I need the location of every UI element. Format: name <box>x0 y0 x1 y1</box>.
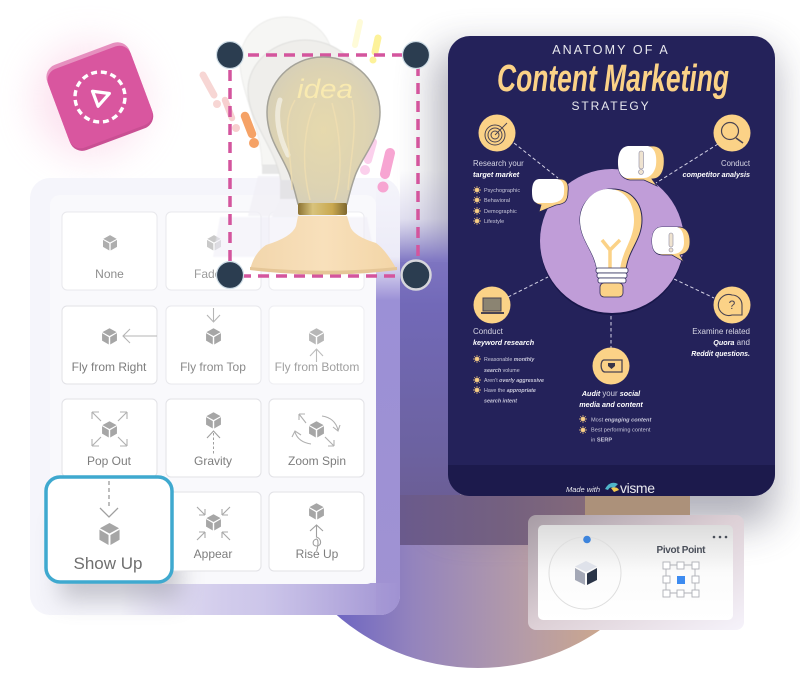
card: Fly from Right: Fly from Right <box>72 360 147 374</box>
text: audit: media and content <box>579 400 643 409</box>
title <box>497 43 729 113</box>
panel: pivot point <box>528 515 744 630</box>
shadow behind selected card <box>60 520 180 600</box>
mark: pink <box>385 153 390 174</box>
mark: pale pink right <box>368 142 373 160</box>
text: quora: Reddit questions. <box>691 351 750 358</box>
card: Appear: Appear <box>194 547 232 561</box>
text: research <box>473 159 524 179</box>
ghost bulb front <box>248 40 362 190</box>
list: research: Lifestyle <box>484 219 504 225</box>
text: quora: Quora and <box>713 338 750 347</box>
card: Fly from Bottom <box>269 306 364 384</box>
title: ANATOMY OF A <box>552 43 670 57</box>
list: keyword: Have the appropriate <box>484 388 536 394</box>
icon: magnifier <box>714 114 750 152</box>
card: Zoom Spin: Zoom Spin <box>288 454 346 468</box>
card: Zoom Spin <box>269 399 364 477</box>
card: Rise Up <box>269 492 364 571</box>
card: None: None <box>95 267 124 281</box>
mark: orange <box>245 116 252 134</box>
icon: target <box>478 114 516 152</box>
background circle <box>263 50 775 668</box>
list: audit: Best performing content <box>591 428 651 434</box>
card: Gravity <box>166 399 261 477</box>
poster footer <box>448 465 775 496</box>
base <box>250 216 397 274</box>
card: hidden <box>269 212 364 290</box>
pivot inner card <box>538 525 733 620</box>
icon: light bulb <box>250 57 397 274</box>
text: competitor: Conduct <box>721 159 751 168</box>
text: competitor: competitor analysis <box>682 170 750 179</box>
footer branding: visme <box>620 480 655 496</box>
list: audit: Most engaging content <box>591 418 652 424</box>
rotation dial <box>549 536 621 609</box>
card: Rise Up: Rise Up <box>296 547 339 561</box>
speech bubble top <box>618 146 664 186</box>
list: keyword: Reasonable monthly <box>484 357 535 363</box>
icon: pink play tile <box>43 39 157 155</box>
exclamation marks <box>203 22 390 192</box>
poster shadow <box>435 50 775 525</box>
card: Fly from Top <box>166 306 261 384</box>
list: keyword: search intent <box>484 398 517 404</box>
text: keyword: Conduct <box>473 327 504 336</box>
card: Gravity: Gravity <box>194 454 232 468</box>
panel: animation presets <box>30 178 400 615</box>
inner panel <box>50 195 376 584</box>
footer branding: Made with <box>566 485 600 494</box>
text: competitor <box>682 159 751 179</box>
selection box dashed <box>230 55 418 276</box>
card: Appear <box>166 492 261 571</box>
card: Fly from Top: Fly from Top <box>180 360 246 374</box>
text: research: Research your <box>473 159 524 168</box>
centre circle <box>540 171 684 315</box>
text: audit <box>579 389 643 409</box>
card: Fade <box>166 212 261 290</box>
card: Pop Out <box>62 399 157 477</box>
panel: poster <box>448 36 775 496</box>
list: research: Demographic <box>484 209 517 215</box>
mark: pale pink 2 <box>225 100 232 118</box>
text: quora: Examine related <box>692 327 750 336</box>
icon: heart bubble <box>592 348 630 384</box>
speech bubble left <box>532 179 568 212</box>
list: keyword: search volume <box>484 368 520 374</box>
mark: pale yellow <box>355 22 360 45</box>
list: keyword <box>473 355 544 404</box>
bulb glass <box>267 57 380 204</box>
brass collar <box>298 203 347 215</box>
card: Show Up selected <box>46 477 172 582</box>
card: Show Up selected: Show Up <box>74 554 142 573</box>
ghost bulb back <box>240 17 333 165</box>
pivot grid <box>663 562 699 597</box>
icon: question: ? <box>729 298 736 312</box>
icon: question <box>714 286 750 324</box>
dashed connectors <box>508 143 718 348</box>
mark: yellow <box>375 38 378 52</box>
list: research: Psychographic <box>484 188 520 194</box>
card: Fly from Bottom: Fly from Bottom <box>275 360 359 374</box>
ghost bulbs <box>213 17 375 257</box>
list: keyword: Aren't overly aggressive <box>484 378 544 384</box>
list: research <box>473 186 520 225</box>
title: STRATEGY <box>572 99 650 113</box>
card: Fly from Right <box>62 306 157 384</box>
selection handles <box>216 42 430 290</box>
list: research: Behavioral <box>484 198 510 204</box>
text: quora <box>691 327 750 358</box>
text: audit: Audit your social <box>581 389 641 398</box>
icon: laptop <box>474 286 510 324</box>
pink glow <box>35 45 145 155</box>
list: audit <box>579 415 652 444</box>
text: research: target market <box>473 170 520 179</box>
card: None <box>62 212 157 290</box>
footer branding <box>566 480 655 496</box>
card: Pop Out: Pop Out <box>87 454 132 468</box>
filament word: idea <box>297 74 353 104</box>
mark: pale pink 1 <box>203 75 214 95</box>
list: audit: in SERP <box>591 438 612 444</box>
text: keyword: keyword research <box>473 338 535 347</box>
card: Fade: Fade <box>194 267 222 281</box>
menu dots <box>713 536 727 538</box>
text: keyword <box>473 327 535 347</box>
central bulb <box>580 189 642 297</box>
pivot label: Pivot Point <box>656 545 706 556</box>
speech bubble right <box>652 227 690 262</box>
